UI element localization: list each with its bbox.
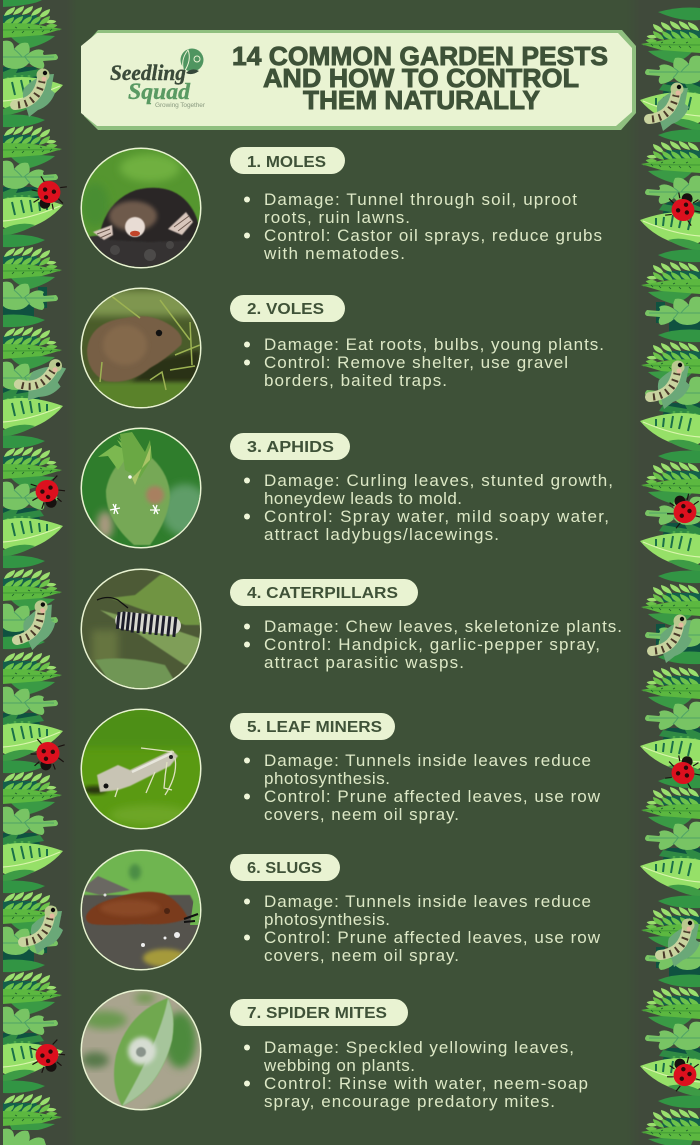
- photo: caterpillar: [80, 568, 205, 690]
- bullet list: [244, 617, 622, 672]
- photo: mole: [75, 147, 205, 272]
- title: AND HOW TO CONTROL: [263, 63, 579, 93]
- label pill: [230, 999, 408, 1026]
- label pill: 4. CATERPILLARS: [247, 585, 398, 602]
- right leaf border: [640, 8, 700, 1145]
- bullet list: Control: Castor oil sprays, reduce grubs: [264, 226, 602, 245]
- icon: caterpillar: [15, 68, 55, 117]
- header banner: [81, 30, 636, 130]
- label pill: [230, 579, 418, 606]
- bullet list: Control: Rinse with water, neem-soap: [264, 1074, 588, 1093]
- photo: leaf miner moth: [80, 708, 202, 830]
- bullet list: covers, neem oil spray.: [264, 805, 459, 824]
- icon: ladybug: [663, 188, 700, 227]
- photo: spider mites on leaf: [80, 989, 202, 1111]
- bullet list: Damage: Eat roots, bulbs, young plants.: [264, 335, 604, 354]
- bullet list: [244, 892, 601, 965]
- icon: caterpillar: [15, 350, 69, 409]
- icon: ladybug: [662, 1052, 700, 1093]
- icon: ladybug: [663, 751, 700, 790]
- bullet list: attract ladybugs/lacewings.: [264, 525, 499, 544]
- bullet list: borders, baited traps.: [264, 371, 447, 390]
- bullet list: Control: Handpick, garlic-pepper spray,: [264, 635, 600, 654]
- bullet list: [244, 335, 604, 390]
- label pill: 1. MOLES: [247, 154, 326, 171]
- bullet list: Damage: Curling leaves, stunted growth,: [264, 471, 613, 490]
- label pill: 2. VOLES: [247, 301, 324, 318]
- bullet list: Control: Spray water, mild soapy water,: [264, 507, 609, 526]
- bullet list: covers, neem oil spray.: [264, 946, 459, 965]
- panel: aphids: [80, 427, 613, 549]
- icon: caterpillar: [13, 599, 58, 652]
- bullet list: spray, encourage predatory mites.: [264, 1092, 555, 1111]
- logo: [110, 48, 206, 109]
- bullet list: photosynthesis.: [264, 910, 390, 929]
- label pill: 7. SPIDER MITES: [247, 1005, 387, 1022]
- photo: slug: [80, 849, 205, 975]
- logo: Growing Together: [155, 102, 206, 109]
- bullet list: Damage: Speckled yellowing leaves,: [264, 1038, 574, 1057]
- panel: caterpillars: [80, 568, 622, 690]
- icon: ladybug: [27, 1038, 69, 1077]
- label pill: 3. APHIDS: [247, 439, 334, 456]
- panel: voles: [80, 287, 604, 412]
- bullet list: webbing on plants.: [263, 1056, 415, 1075]
- bullet list: with nematodes.: [263, 244, 405, 263]
- label pill: [230, 433, 350, 460]
- bullet list: [244, 751, 601, 824]
- bullet list: [244, 1038, 588, 1111]
- panel: slugs: [80, 849, 601, 975]
- bullet list: photosynthesis.: [264, 769, 390, 788]
- bullet list: Control: Remove shelter, use gravel: [264, 353, 568, 372]
- bullet list: roots, ruin lawns.: [264, 208, 410, 227]
- bullet list: Damage: Tunnel through soil, uproot: [264, 190, 577, 209]
- icon: caterpillar: [649, 82, 689, 131]
- bullet list: attract parasitic wasps.: [264, 653, 464, 672]
- icon: caterpillar: [650, 360, 690, 409]
- label pill: [230, 147, 345, 174]
- label pill: [230, 854, 340, 881]
- icon: caterpillar: [23, 906, 63, 954]
- logo: Squad: [128, 79, 191, 104]
- label pill: [230, 713, 395, 740]
- photo: aphids on bud: [80, 427, 209, 549]
- panel: spider mites: [80, 989, 588, 1111]
- label pill: 6. SLUGS: [247, 860, 322, 877]
- label pill: [230, 295, 345, 322]
- bullet list: honeydew leads to mold.: [264, 489, 462, 508]
- title: 14 COMMON GARDEN PESTS: [232, 41, 608, 71]
- bullet list: Control: Prune affected leaves, use row: [264, 928, 601, 947]
- left leaf border: [3, 0, 69, 1145]
- bullet list: Damage: Tunnels inside leaves reduce: [264, 892, 591, 911]
- icon: caterpillar: [652, 614, 692, 663]
- bullet list: [244, 190, 602, 263]
- icon: ladybug: [662, 489, 700, 530]
- panel: leaf miners: [80, 708, 601, 830]
- icon: ladybug: [27, 474, 69, 513]
- title: THEM NATURALLY: [303, 85, 540, 115]
- bullet list: Damage: Chew leaves, skeletonize plants.: [264, 617, 622, 636]
- label pill: 5. LEAF MINERS: [247, 719, 382, 736]
- bullet list: Control: Prune affected leaves, use row: [264, 787, 601, 806]
- icon: ladybug: [27, 175, 69, 214]
- logo: Seedling: [110, 60, 186, 85]
- title: [232, 41, 608, 115]
- bullet list: Damage: Tunnels inside leaves reduce: [264, 751, 591, 770]
- bullet list: [244, 471, 613, 544]
- icon: caterpillar: [660, 918, 700, 967]
- panel: moles: [75, 147, 602, 272]
- photo: vole: [80, 287, 202, 412]
- icon: ladybug: [28, 738, 67, 773]
